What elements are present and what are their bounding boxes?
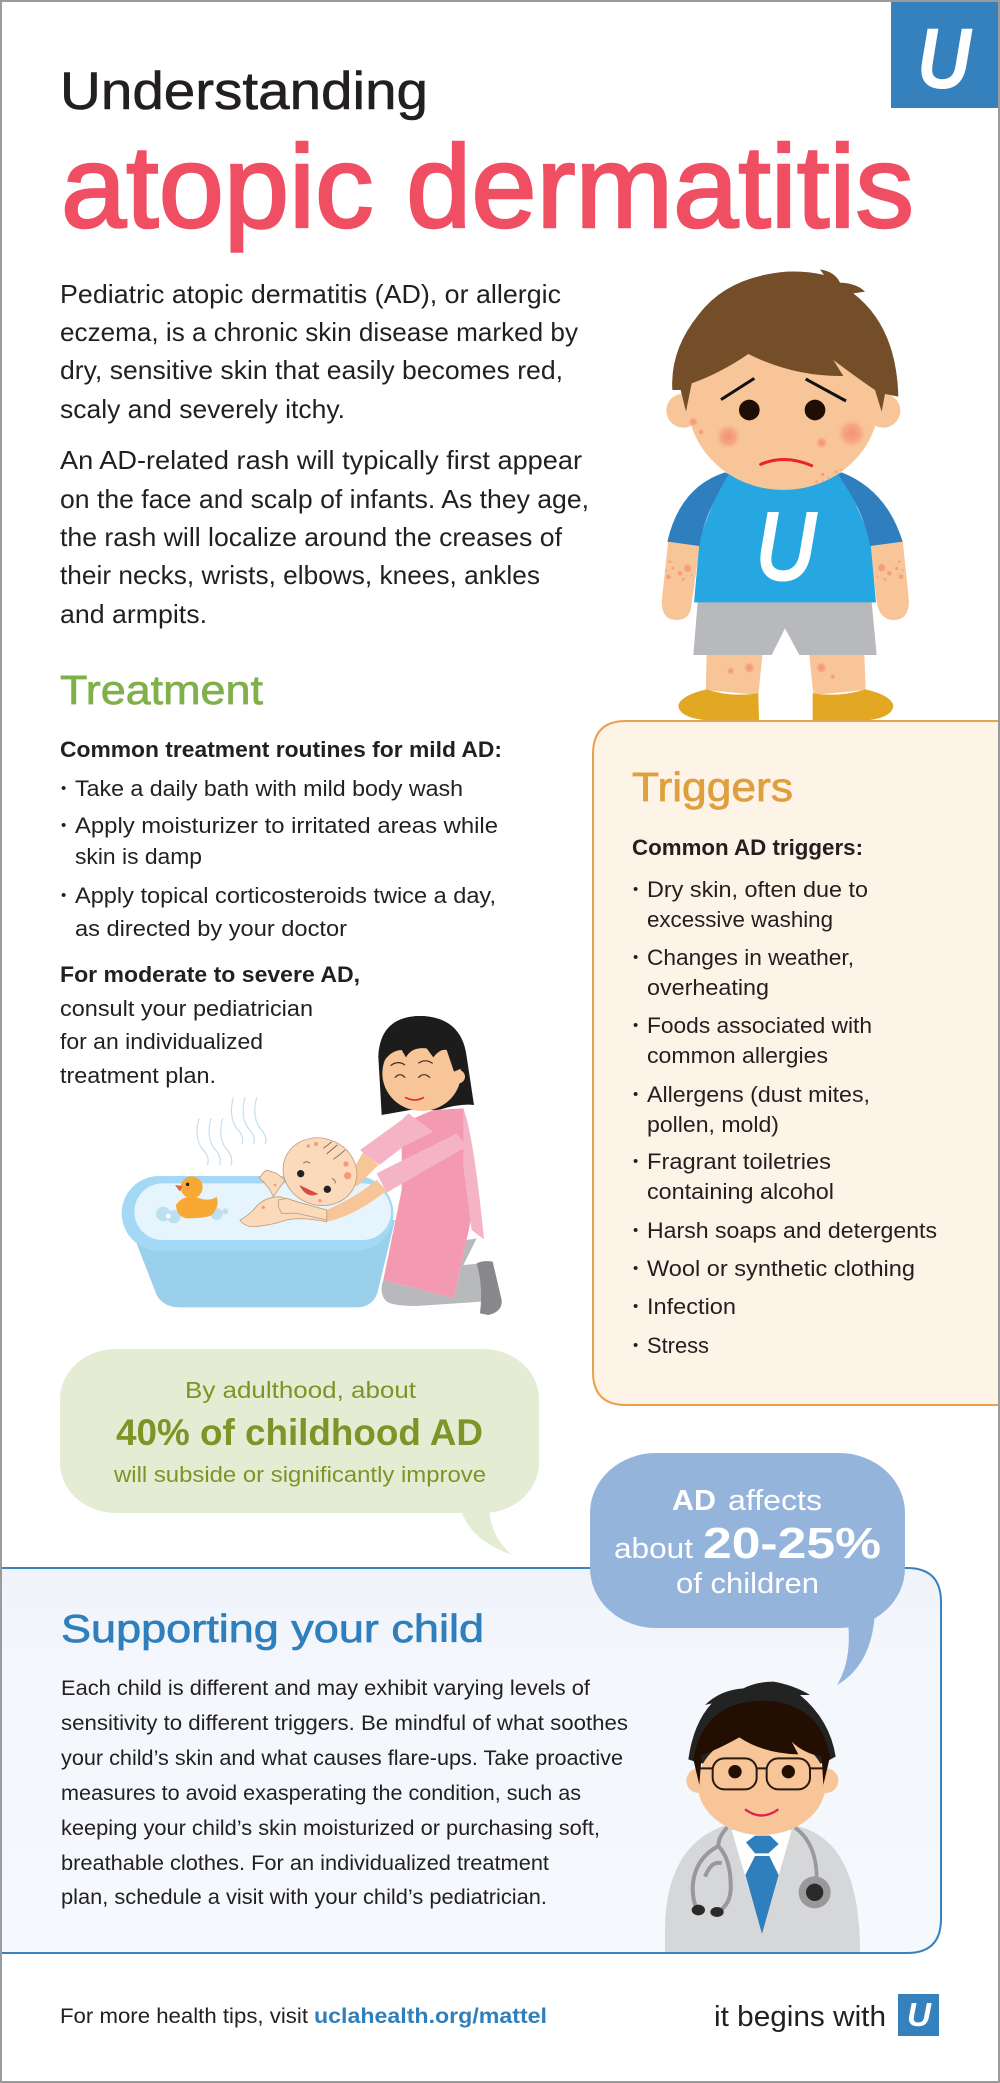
triggers list: Fragrant toiletries [647, 1149, 831, 1174]
footer: website link: For more health tips, visit [60, 2005, 308, 2028]
triggers list: Foods associated with [647, 1013, 872, 1038]
illustration: baby [240, 1128, 366, 1227]
triggers subheading: Common AD triggers: [632, 835, 863, 860]
treatment text: Apply topical corticosteroids twice a day, [75, 883, 496, 908]
triggers list: • [633, 881, 638, 898]
icon: rubber duck [156, 1176, 228, 1223]
intro text: dry, sensitive skin that easily becomes red, [60, 355, 563, 385]
panel: triggers [593, 721, 1000, 1405]
callout: 20-25 percent: of children [676, 1568, 819, 1600]
title: atopic dermatitis [61, 121, 914, 252]
supporting text: plan, schedule a visit with your child’s pediatrician. [61, 1886, 547, 1909]
callout: 20-25 percent [590, 1453, 905, 1685]
footer: website link: uclahealth.org/mattel [314, 2005, 547, 2028]
triggers list: • [633, 1153, 638, 1170]
callout: 40 percent: By adulthood, about [185, 1377, 417, 1403]
treatment text: Take a daily bath with mild body wash [75, 776, 463, 801]
triggers list: excessive washing [647, 907, 833, 932]
supporting text: Each child is different and may exhibit varying levels of [61, 1677, 590, 1700]
treatment text: • [61, 887, 66, 904]
supporting text: measures to avoid exasperating the condition, such as [61, 1782, 581, 1805]
triggers list: containing alcohol [647, 1179, 834, 1204]
triggers list: • [633, 1298, 638, 1315]
logo: U badge: U [917, 11, 973, 107]
illustration: sad boy with eczema [662, 269, 909, 720]
callout: 20-25 percent: 20-25% [703, 1519, 881, 1568]
treatment text: For moderate to severe AD, [60, 962, 360, 987]
treatment text: for an individualized [60, 1029, 263, 1054]
treatment text: consult your pediatrician [60, 996, 313, 1021]
supporting text: breathable clothes. For an individualized treatment [61, 1852, 549, 1875]
triggers list: pollen, mold) [647, 1112, 779, 1137]
triggers list: Stress [647, 1333, 709, 1358]
callout: 20-25 percent: AD [672, 1485, 716, 1517]
intro text: An AD-related rash will typically first appear [60, 445, 582, 475]
triggers list: • [633, 949, 638, 966]
title [60, 62, 914, 252]
triggers list: • [633, 1017, 638, 1034]
callout: 40 percent: 40% of childhood AD [116, 1412, 483, 1453]
treatment text: • [61, 817, 66, 834]
treatment text [60, 737, 502, 1088]
triggers list: Harsh soaps and detergents [647, 1218, 937, 1243]
heading: treatment: Treatment [60, 667, 264, 713]
triggers list: Wool or synthetic clothing [647, 1256, 915, 1281]
icon: bathtub [122, 1176, 395, 1307]
supporting text: sensitivity to different triggers. Be mindful of what soothes [61, 1712, 628, 1735]
treatment text: as directed by your doctor [75, 916, 348, 941]
triggers list: Dry skin, often due to [647, 877, 868, 902]
logo: U badge [891, 0, 999, 108]
intro text [60, 279, 589, 629]
callout: 20-25 percent: about [614, 1533, 693, 1565]
treatment text: Common treatment routines for mild AD: [60, 737, 502, 762]
supporting heading: Supporting your child [61, 1608, 484, 1651]
intro text: on the face and scalp of infants. As they age, [60, 484, 589, 514]
triggers list: common allergies [647, 1043, 828, 1068]
treatment text: skin is damp [75, 844, 202, 869]
callout: 40 percent [60, 1349, 539, 1555]
callout: 20-25 percent: affects [728, 1485, 822, 1517]
triggers list: • [633, 1222, 638, 1239]
callout: 40 percent: will subside or significantly improve [113, 1462, 486, 1487]
triggers list: • [633, 1086, 638, 1103]
triggers list: overheating [647, 975, 769, 1000]
icon: steam [197, 1097, 266, 1165]
triggers list: Infection [647, 1294, 736, 1319]
intro text: and armpits. [60, 599, 207, 629]
illustration: doctor [665, 1682, 860, 1952]
supporting text [61, 1677, 628, 1909]
supporting text: your child’s skin and what causes flare-ups. Take proactive [61, 1747, 623, 1770]
intro text: Pediatric atopic dermatitis (AD), or allergic [60, 279, 561, 309]
treatment text: treatment plan. [60, 1063, 216, 1088]
treatment text: • [61, 780, 66, 797]
footer: website link [60, 2005, 547, 2028]
triggers list: Allergens (dust mites, [647, 1082, 870, 1107]
triggers list [633, 877, 937, 1358]
intro text: scaly and severely itchy. [60, 394, 345, 424]
illustration: mother bathing baby [122, 1016, 502, 1315]
triggers list: • [633, 1337, 638, 1354]
supporting text: keeping your child’s skin moisturized or purchasing soft, [61, 1817, 600, 1840]
treatment text: Apply moisturizer to irritated areas while [75, 813, 498, 838]
intro text: their necks, wrists, elbows, knees, ankles [60, 560, 540, 590]
intro text: eczema, is a chronic skin disease marked by [60, 317, 578, 347]
triggers heading: Triggers [632, 764, 793, 810]
triggers list: Changes in weather, [647, 945, 854, 970]
illustration: mother [327, 1016, 502, 1315]
panel: supporting your child [0, 1568, 941, 1953]
footer: it begins with U logo [714, 1994, 939, 2036]
footer: it begins with U logo: it begins with [714, 2001, 886, 2033]
intro text: the rash will localize around the creases of [60, 522, 563, 552]
title: Understanding [60, 62, 428, 121]
triggers list: • [633, 1260, 638, 1277]
footer: it begins with U logo: U [907, 1996, 932, 2033]
illustration: sad boy with eczema: U [756, 494, 816, 598]
